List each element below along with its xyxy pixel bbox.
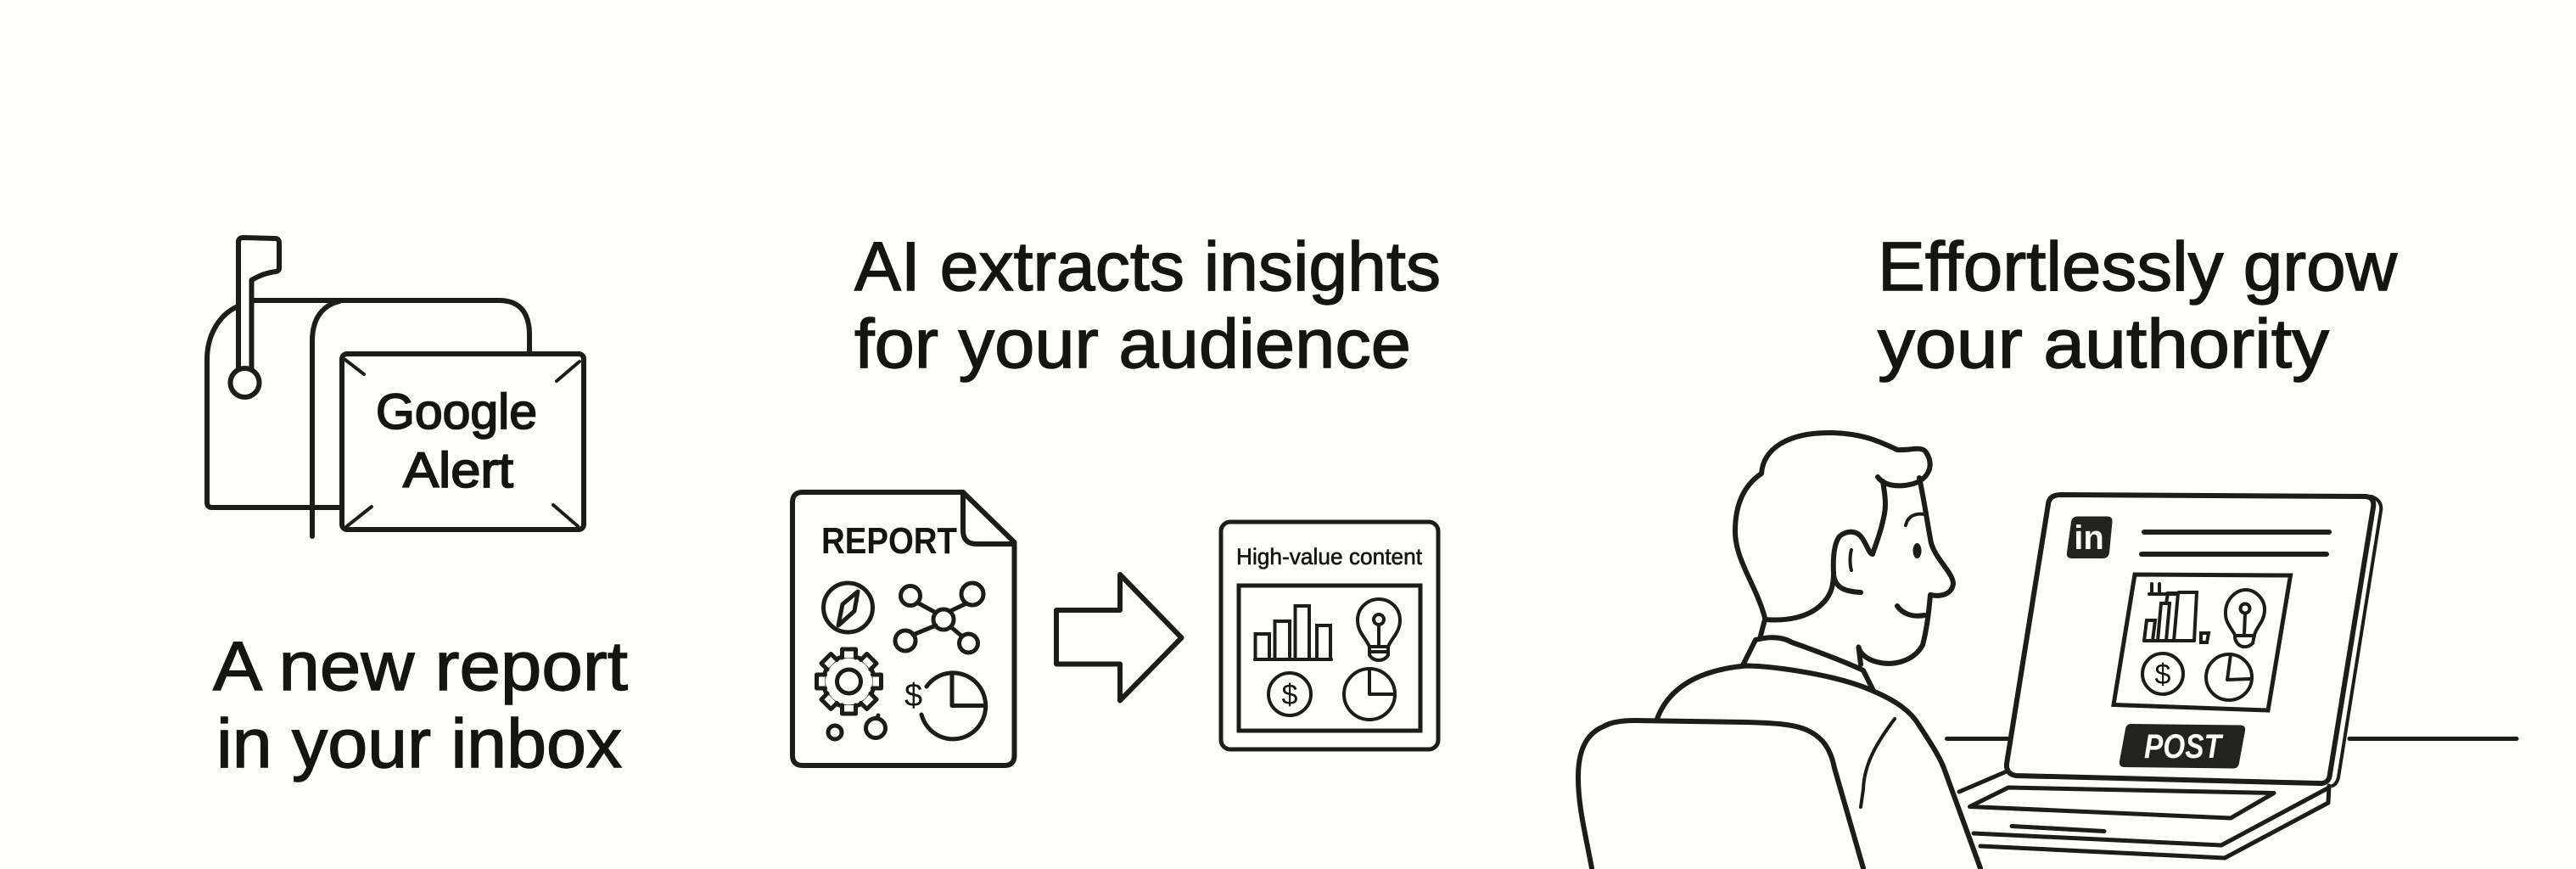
icon: compass <box>823 583 872 632</box>
panel: inbox <box>207 238 628 782</box>
heading: a new report <box>213 628 628 782</box>
icon: report document <box>792 492 1015 765</box>
icon: envelope: Google <box>376 384 537 440</box>
icon: pie with dollar: $ <box>904 678 922 714</box>
heading: AI extracts insights: for your audience <box>854 306 1411 383</box>
post image frame <box>2114 575 2291 710</box>
heading: effortlessly grow <box>1878 228 2398 383</box>
post button: POST <box>2144 728 2224 765</box>
icon: dollar coin: $ <box>1282 679 1298 711</box>
icon: mailbox <box>207 238 529 536</box>
trackpad <box>1970 788 2274 818</box>
heading: effortlessly grow: Effortlessly grow <box>1878 228 2398 306</box>
icon: report document: REPORT <box>821 520 957 562</box>
icon: envelope <box>342 354 584 530</box>
panel: high-value content <box>1221 522 1438 749</box>
label: high-value content: High-value content <box>1236 544 1422 569</box>
heading: AI extracts insights <box>854 228 1441 383</box>
icon: envelope: Alert <box>403 443 513 498</box>
icon: lightbulb <box>1358 599 1400 660</box>
arrow <box>1056 575 1181 701</box>
mini pie <box>2206 654 2252 700</box>
mini dollar coin: $ <box>2155 659 2171 691</box>
icon: linkedin badge: in <box>2074 519 2104 557</box>
illustration: person at chair <box>1578 433 1980 868</box>
heading: effortlessly grow: your authority <box>1878 306 2329 383</box>
icon: network <box>895 583 983 653</box>
panel: grow authority <box>1578 228 2517 868</box>
icon: pie chart <box>1344 669 1395 720</box>
icon: dollar coin <box>1268 673 1311 715</box>
icon: linkedin badge <box>2067 516 2113 558</box>
inner frame <box>1239 586 1420 731</box>
panel: AI extraction <box>792 228 1441 765</box>
heading: a new report: A new report <box>213 628 628 705</box>
small circles <box>828 715 886 739</box>
heading: a new report: in your inbox <box>216 705 622 782</box>
heading: AI extracts insights: AI extracts insights <box>854 228 1441 306</box>
mini dollar coin <box>2142 653 2183 694</box>
icon: gear <box>816 649 881 714</box>
mini lightbulb <box>2226 590 2265 647</box>
icon: pie with dollar <box>904 673 986 739</box>
bar chart <box>1255 606 1331 659</box>
mini bar chart <box>2144 584 2209 642</box>
illustration: laptop <box>1946 495 2517 858</box>
post button <box>2120 724 2245 769</box>
